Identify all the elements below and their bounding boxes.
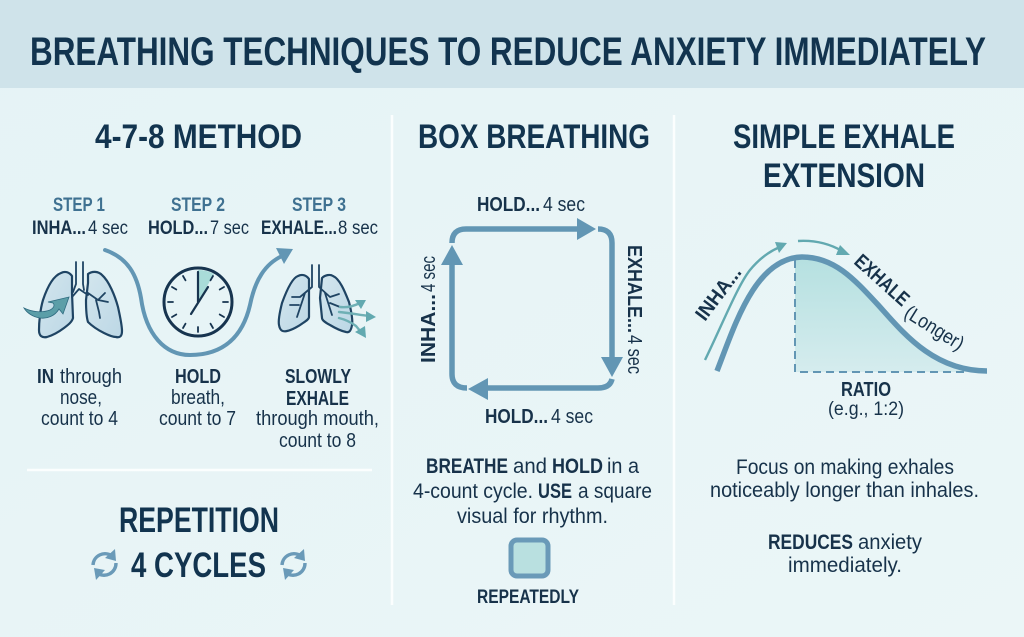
inhale label: INHA... bbox=[691, 262, 746, 325]
box breathing description: USE bbox=[538, 480, 572, 503]
anxiety reduction note: REDUCES bbox=[768, 531, 853, 554]
step 3 label: 8 sec bbox=[338, 218, 378, 239]
panel: 4-7-8 method bbox=[24, 118, 379, 585]
icon: clock bbox=[164, 268, 232, 336]
top label: hold bbox=[477, 194, 585, 216]
box breathing description: and bbox=[513, 455, 547, 478]
ratio label: RATIO bbox=[841, 379, 891, 401]
title banner bbox=[0, 0, 1024, 88]
step 2 label: STEP 2 bbox=[171, 195, 225, 216]
right label: exhale: EXHALE... bbox=[623, 245, 645, 333]
4 cycles label: 4 CYCLES bbox=[131, 546, 266, 585]
box breathing description: visual for rhythm. bbox=[457, 505, 608, 528]
box breathing description: HOLD bbox=[552, 455, 603, 478]
breath curve chart bbox=[691, 241, 987, 420]
left label: inhale: 4 sec bbox=[418, 256, 440, 292]
step 3 label: EXHALE... bbox=[261, 218, 337, 239]
step 1 description: count to 4 bbox=[41, 407, 118, 430]
anxiety reduction note: anxiety bbox=[858, 531, 922, 554]
step 2 description bbox=[159, 365, 236, 430]
ratio label: (e.g., 1:2) bbox=[828, 399, 904, 420]
step 1 label: 4 sec bbox=[88, 218, 128, 239]
heading: 4-7-8 method: 4-7-8 METHOD bbox=[95, 118, 302, 156]
anxiety reduction note: immediately. bbox=[788, 554, 902, 577]
exhale label: EXHALE bbox=[850, 250, 913, 311]
step 1 label: INHA... bbox=[32, 218, 86, 239]
box breathing description: BREATHE bbox=[426, 455, 508, 478]
top label: hold: 4 sec bbox=[543, 194, 585, 216]
left label: inhale bbox=[418, 256, 440, 363]
step 3 description: EXHALE bbox=[286, 387, 349, 410]
step 2 label: 7 sec bbox=[210, 218, 249, 239]
bottom label: hold bbox=[485, 406, 593, 428]
right label: exhale: 4 sec bbox=[623, 335, 645, 374]
ratio label bbox=[828, 379, 904, 420]
exhale arrow bbox=[798, 241, 850, 255]
step 3 description: SLOWLY bbox=[285, 365, 351, 388]
bottom label: hold: 4 sec bbox=[551, 406, 593, 428]
step 3 label bbox=[261, 195, 378, 239]
step 1 description: nose, bbox=[60, 386, 102, 409]
longer label: (Longer) bbox=[900, 302, 968, 355]
icon: lungs exhaling bbox=[279, 265, 376, 338]
heading: simple exhale extension: EXTENSION bbox=[763, 157, 925, 195]
left label: inhale: INHA... bbox=[418, 294, 440, 363]
step 2 description: breath, bbox=[171, 386, 225, 409]
step 1 description: IN bbox=[37, 365, 54, 388]
anxiety reduction note bbox=[768, 531, 922, 577]
top label: hold: HOLD... bbox=[477, 194, 540, 216]
heading: box breathing: BOX BREATHING bbox=[418, 118, 650, 156]
step 1 description bbox=[37, 365, 122, 430]
step 2 label bbox=[148, 195, 249, 239]
heading: simple exhale extension bbox=[733, 118, 955, 195]
icon: repeat left bbox=[93, 549, 116, 580]
icon: small square bbox=[511, 540, 548, 576]
step 1 description: through bbox=[60, 365, 122, 388]
box breathing description: in a bbox=[607, 455, 639, 478]
step 1 label bbox=[32, 195, 128, 239]
inhale arrow bbox=[705, 242, 787, 360]
step 3 description bbox=[256, 365, 379, 452]
box breathing description bbox=[413, 455, 652, 528]
bottom label: hold: HOLD... bbox=[485, 406, 548, 428]
step 3 label: STEP 3 bbox=[292, 195, 346, 216]
square breathing diagram bbox=[418, 194, 645, 428]
exhale description: Focus on making exhales bbox=[736, 456, 954, 479]
step 1 label: STEP 1 bbox=[53, 195, 105, 216]
panel: box breathing bbox=[413, 118, 652, 608]
flow arrow from step 1 to step 3 bbox=[105, 248, 293, 355]
panel: simple exhale extension bbox=[691, 118, 987, 577]
exhale description bbox=[710, 456, 979, 502]
box breathing description: 4-count cycle. bbox=[413, 480, 533, 503]
step 3 description: through mouth, bbox=[256, 407, 379, 430]
repeatedly label: REPEATEDLY bbox=[477, 587, 579, 608]
box breathing description: a square bbox=[578, 480, 652, 503]
heading: simple exhale extension: SIMPLE EXHALE bbox=[733, 118, 955, 156]
repetition heading: REPETITION bbox=[119, 501, 279, 540]
icon: repeat right bbox=[282, 549, 305, 580]
exhale description: noticeably longer than inhales. bbox=[710, 479, 979, 502]
step 2 label: HOLD... bbox=[148, 218, 208, 239]
step 3 description: count to 8 bbox=[279, 429, 356, 452]
step 2 description: HOLD bbox=[175, 365, 221, 388]
icon: lungs inhaling bbox=[24, 262, 122, 337]
step 2 description: count to 7 bbox=[159, 407, 236, 430]
